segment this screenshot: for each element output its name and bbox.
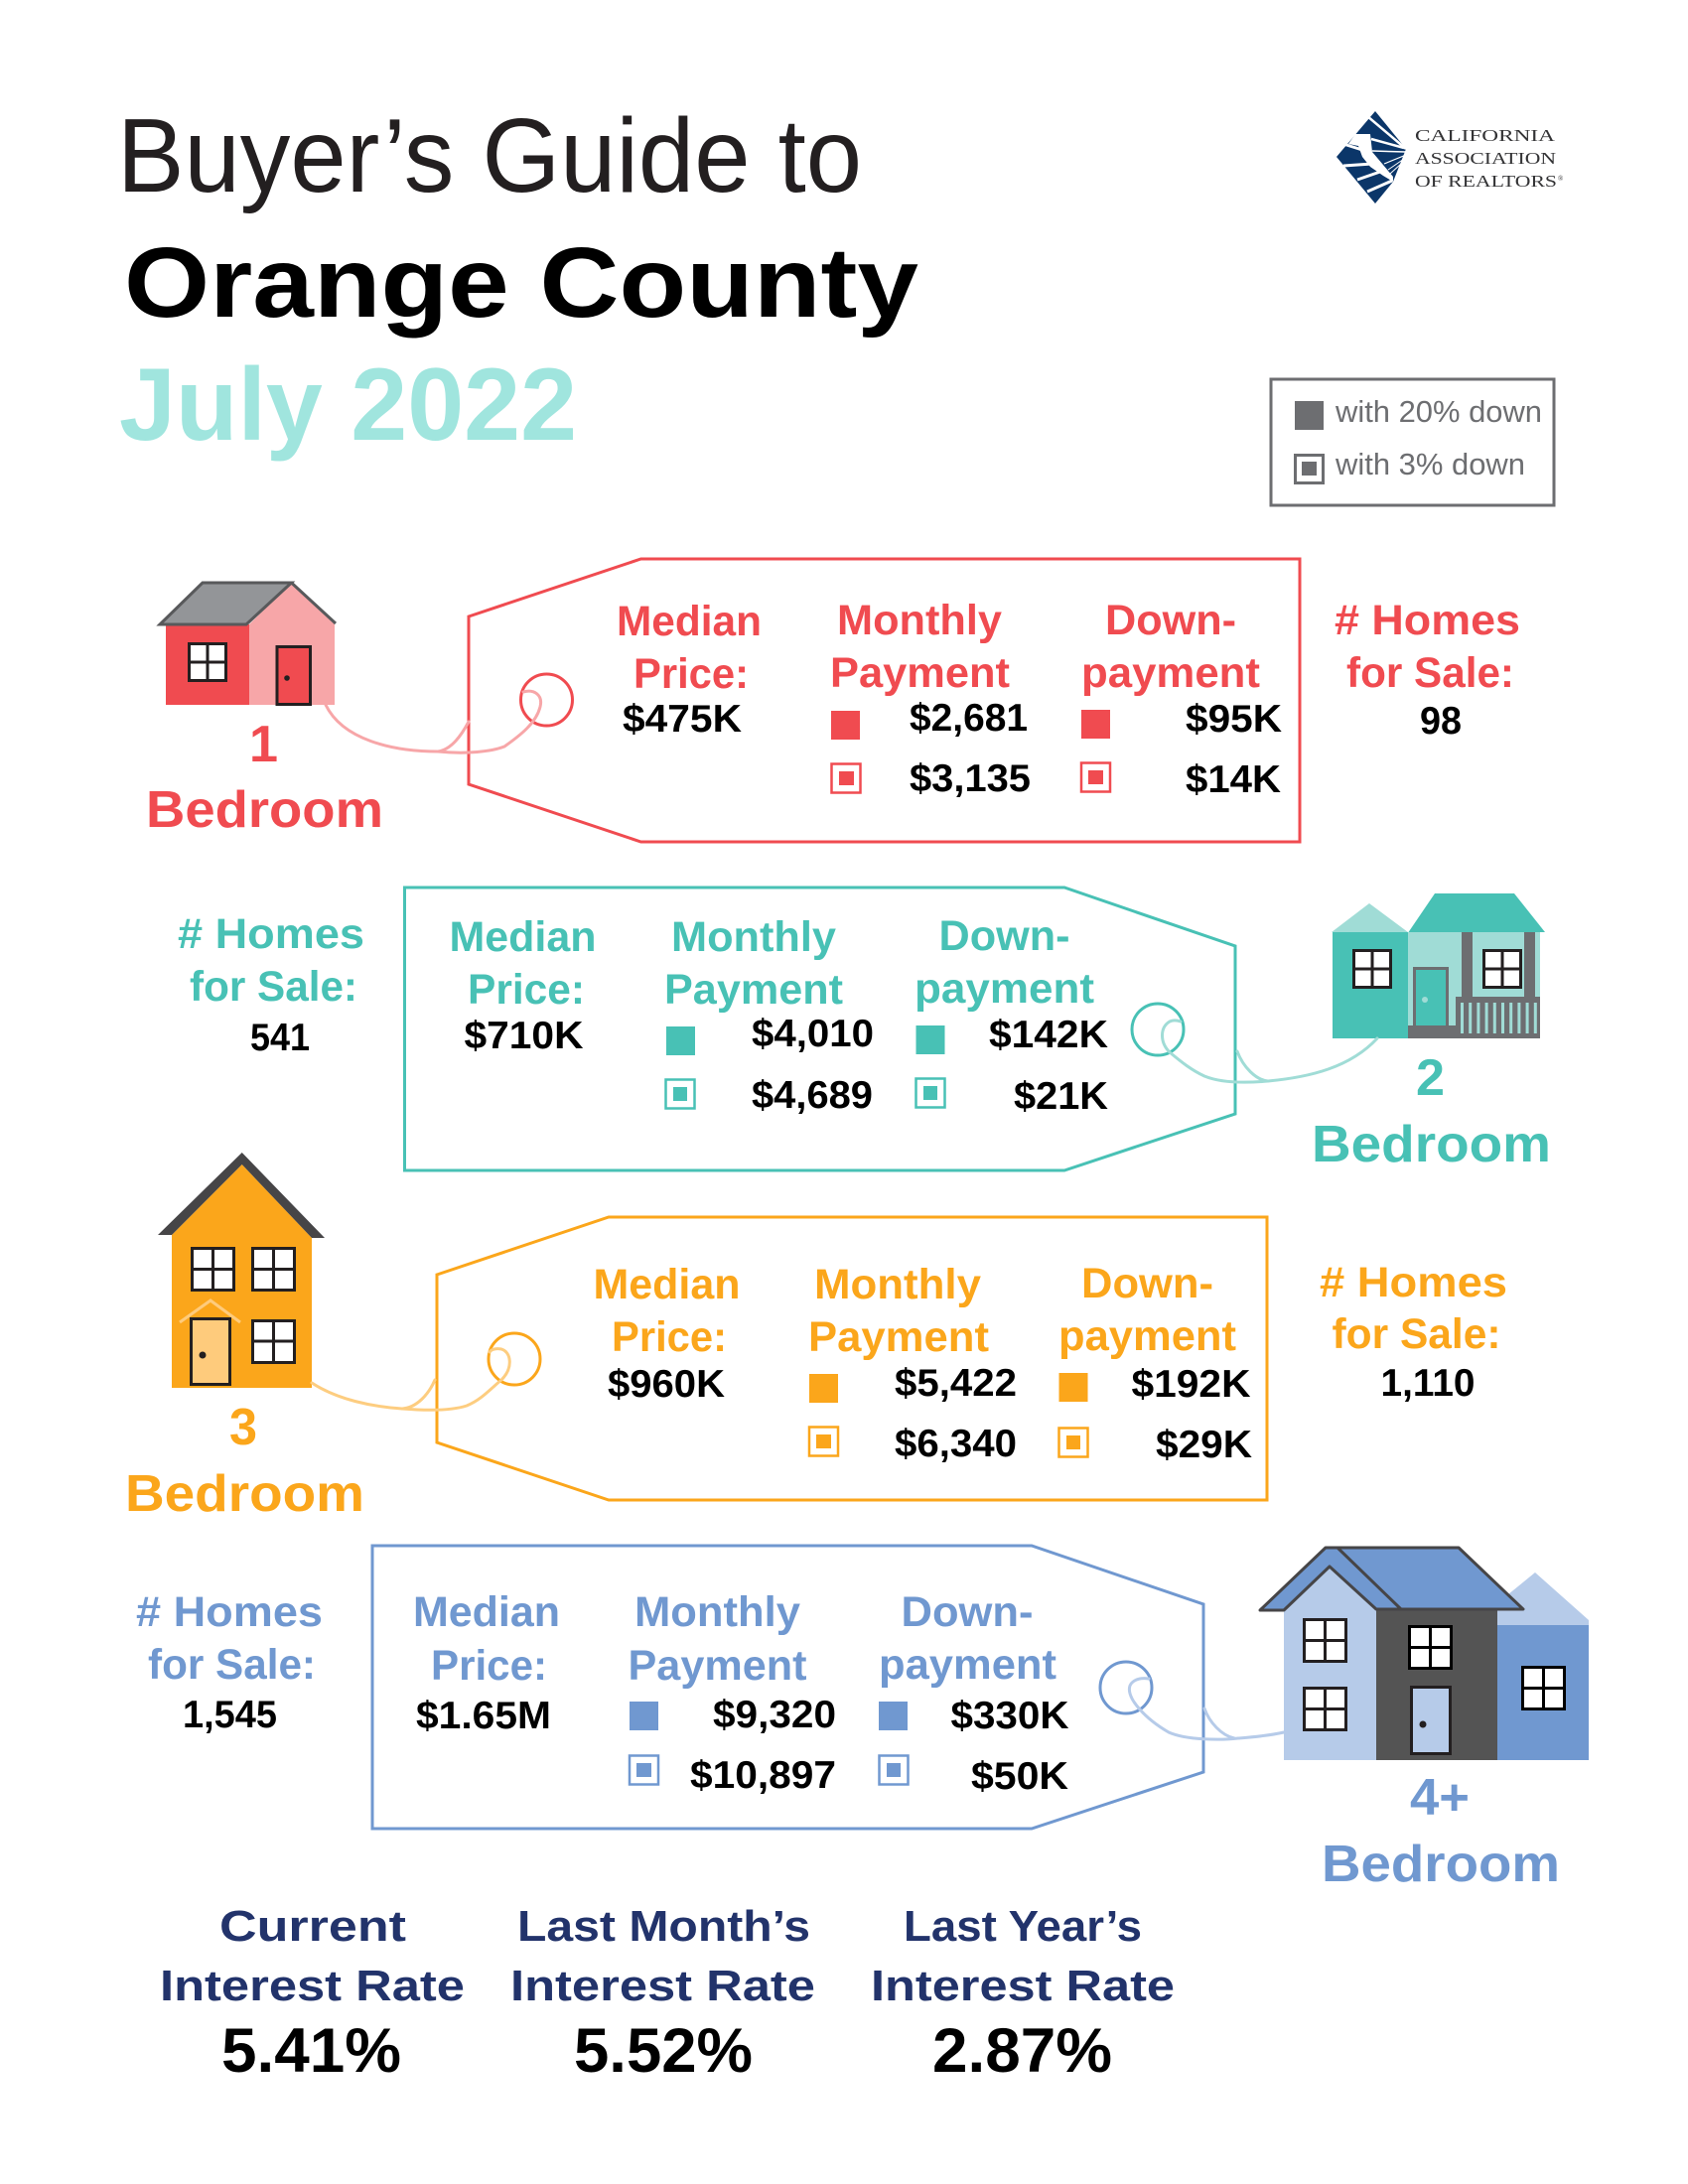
monthly payment: Payment — [808, 1313, 989, 1361]
median price: Price: — [612, 1313, 727, 1361]
homes for sale: # Homes — [178, 910, 364, 958]
median price — [413, 1588, 560, 1737]
title line: Orange County: Orange County — [124, 227, 918, 339]
downpayment: $95K — [1186, 698, 1282, 741]
downpayment: $29K — [1156, 1424, 1252, 1466]
monthly payment: Monthly — [837, 597, 1002, 644]
homes for sale: 98 — [1420, 700, 1462, 743]
panel: interest rates — [160, 1902, 1175, 2086]
median price: $1.65M — [416, 1695, 551, 1737]
monthly payment: Payment — [664, 966, 843, 1014]
monthly payment: $4,689 — [752, 1074, 873, 1117]
downpayment: Down- — [1105, 597, 1236, 644]
median price: Median — [617, 598, 762, 645]
tag string — [312, 1349, 509, 1410]
homes for sale: 541 — [250, 1017, 310, 1059]
label: 4+ Bedroom: Bedroom — [1322, 1836, 1560, 1893]
last month's interest rate: Interest Rate — [510, 1962, 815, 2010]
monthly payment — [628, 1588, 836, 1797]
price tag — [372, 1546, 1203, 1829]
homes for sale: 1,110 — [1380, 1362, 1476, 1405]
monthly payment — [830, 597, 1031, 800]
current interest rate — [160, 1902, 465, 2086]
homes for sale: # Homes — [1335, 597, 1520, 644]
last month's interest rate: Last Month’s — [517, 1902, 810, 1951]
label: 1 Bedroom: 1 — [249, 716, 278, 773]
downpayment: $14K — [1186, 758, 1281, 801]
median price — [449, 913, 596, 1057]
downpayment: $330K — [951, 1695, 1068, 1737]
icon: 4+ bedroom house — [1260, 1548, 1589, 1760]
panel: 3 bedroom — [125, 1153, 1507, 1523]
median price: $960K — [608, 1363, 725, 1406]
price tag — [469, 559, 1300, 842]
downpayment: payment — [914, 965, 1094, 1013]
homes for sale: # Homes — [1320, 1259, 1507, 1306]
monthly payment: $9,320 — [713, 1694, 836, 1736]
downpayment — [914, 912, 1108, 1118]
downpayment: Down- — [1081, 1260, 1213, 1307]
panel: 2 bedroom — [178, 887, 1551, 1173]
median price: Price: — [633, 650, 749, 698]
monthly payment: Payment — [628, 1642, 806, 1690]
median price — [594, 1261, 741, 1406]
label: 3 Bedroom — [125, 1399, 364, 1523]
monthly payment: Monthly — [634, 1588, 800, 1636]
median price: Price: — [468, 966, 585, 1014]
logo: California Association of Realtors — [1336, 111, 1564, 204]
monthly payment: Monthly — [671, 913, 836, 961]
homes for sale — [178, 910, 364, 1059]
legend swatch: with 20% down — [1295, 401, 1324, 430]
median price — [617, 598, 762, 741]
median price: Median — [594, 1261, 741, 1308]
icon: 1 bedroom house — [160, 583, 336, 705]
downpayment — [1058, 1260, 1252, 1466]
monthly payment: $10,897 — [690, 1754, 836, 1797]
tag hole — [1132, 1004, 1184, 1055]
monthly payment: $3,135 — [910, 757, 1031, 800]
monthly payment: $2,681 — [910, 697, 1028, 740]
title line: July 2022: July 2022 — [119, 347, 577, 463]
panel: 4+ bedroom — [136, 1546, 1589, 1893]
last year's interest rate: Last Year’s — [904, 1902, 1142, 1951]
downpayment: Down- — [939, 912, 1070, 960]
homes for sale: for Sale: — [190, 963, 357, 1011]
monthly payment: $5,422 — [895, 1362, 1017, 1405]
price tag — [437, 1217, 1267, 1500]
downpayment — [1081, 597, 1282, 801]
last month's interest rate — [510, 1902, 815, 2086]
downpayment: $142K — [989, 1014, 1108, 1056]
logo wordmark: ASSOCIATION — [1415, 149, 1556, 168]
downpayment: $192K — [1132, 1363, 1251, 1406]
current interest rate: 5.41% — [221, 2016, 401, 2086]
icon: 2 bedroom house — [1332, 893, 1545, 1038]
downpayment: payment — [1058, 1312, 1236, 1360]
median price: $710K — [465, 1015, 584, 1057]
current interest rate: Interest Rate — [160, 1962, 465, 2010]
monthly payment: Monthly — [814, 1261, 981, 1308]
median price: Median — [413, 1588, 560, 1636]
logo mark — [1336, 111, 1406, 204]
tag hole — [520, 674, 572, 726]
label: 3 Bedroom: 3 — [229, 1399, 257, 1456]
label: 2 Bedroom: 2 — [1416, 1049, 1445, 1107]
logo wordmark — [1415, 126, 1564, 191]
homes for sale: # Homes — [136, 1588, 323, 1636]
tag string — [1162, 1021, 1377, 1082]
homes for sale: for Sale: — [1346, 649, 1514, 697]
last year's interest rate: Interest Rate — [871, 1962, 1175, 2010]
label: 4+ Bedroom: 4+ — [1410, 1769, 1470, 1827]
current interest rate: Current — [219, 1902, 406, 1951]
price tag — [405, 887, 1235, 1170]
legend label: with 3% down: with 3% down — [1335, 447, 1525, 481]
legend swatch: with 3% down — [1295, 455, 1323, 482]
homes for sale — [1335, 597, 1520, 743]
icon: 3 bedroom house — [158, 1153, 325, 1388]
label: 1 Bedroom — [146, 716, 383, 839]
logo wordmark: CALIFORNIA — [1415, 126, 1556, 145]
monthly payment: $4,010 — [752, 1013, 874, 1055]
monthly payment — [808, 1261, 1017, 1465]
homes for sale — [1320, 1259, 1507, 1405]
median price: $475K — [623, 698, 742, 741]
last year's interest rate — [871, 1902, 1175, 2086]
downpayment — [879, 1588, 1068, 1798]
last month's interest rate: 5.52% — [574, 2016, 753, 2086]
downpayment: Down- — [902, 1588, 1033, 1636]
logo wordmark: ® — [1558, 175, 1564, 183]
label: 3 Bedroom: Bedroom — [125, 1465, 364, 1523]
homes for sale: for Sale: — [148, 1641, 316, 1689]
homes for sale: 1,545 — [183, 1694, 277, 1736]
title — [117, 97, 918, 463]
homes for sale: for Sale: — [1333, 1310, 1501, 1358]
logo wordmark: OF REALTORS — [1415, 172, 1557, 191]
last year's interest rate: 2.87% — [932, 2016, 1112, 2086]
median price: Price: — [431, 1642, 547, 1690]
label: 2 Bedroom: Bedroom — [1312, 1116, 1551, 1173]
panel: 1 bedroom — [146, 559, 1520, 842]
legend — [1271, 379, 1554, 505]
label: 2 Bedroom — [1312, 1049, 1551, 1173]
median price: Median — [449, 913, 596, 961]
tag hole — [489, 1333, 540, 1385]
monthly payment — [664, 913, 874, 1117]
downpayment: $50K — [971, 1755, 1068, 1798]
downpayment: payment — [1081, 649, 1260, 697]
title line: Buyer's Guide to: Buyer’s Guide to — [117, 97, 862, 214]
label: 1 Bedroom: Bedroom — [146, 781, 383, 839]
tag string — [326, 691, 541, 752]
label: 4+ Bedroom — [1322, 1769, 1560, 1893]
tag string — [1129, 1679, 1284, 1739]
downpayment: payment — [879, 1641, 1056, 1689]
monthly payment: $6,340 — [895, 1423, 1017, 1465]
homes for sale — [136, 1588, 323, 1736]
legend label: with 20% down: with 20% down — [1335, 394, 1542, 429]
monthly payment: Payment — [830, 649, 1010, 697]
downpayment: $21K — [1014, 1075, 1108, 1118]
tag hole — [1100, 1662, 1152, 1713]
